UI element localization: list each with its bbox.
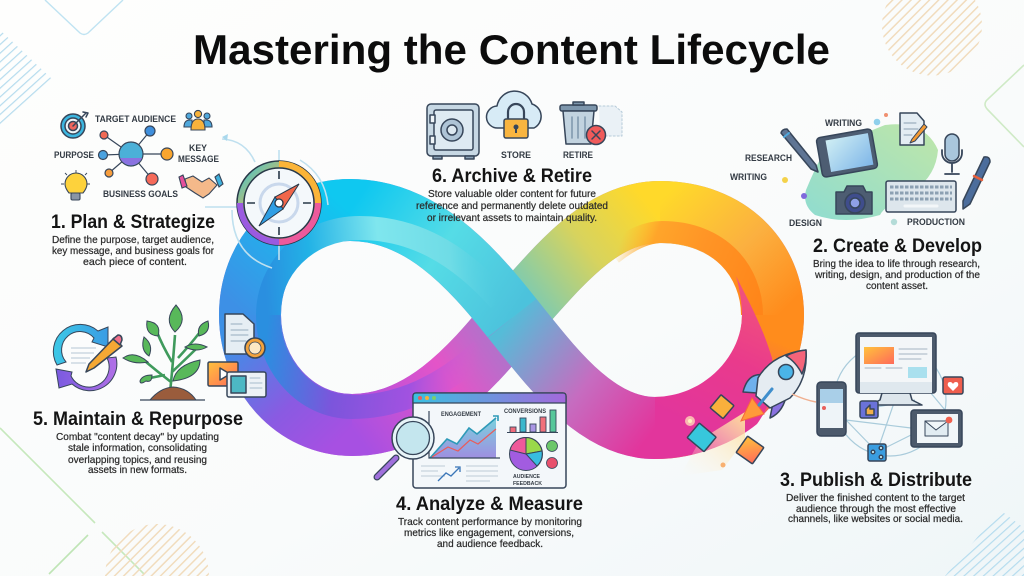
label: key message [178, 143, 219, 164]
heading 4: 4. Analyze & Measure [396, 493, 583, 515]
body 4: metrics like engagement, conversions, [404, 528, 574, 539]
icon: sync arrows [53, 324, 117, 391]
body 1: each piece of content. [83, 257, 187, 268]
icon: document [900, 113, 927, 145]
icon: audience [184, 110, 212, 130]
icon: rocket [743, 350, 806, 418]
icon: handshake [179, 174, 223, 198]
body 1: key message, and business goals for [52, 246, 215, 257]
icon: safe [427, 104, 479, 159]
heading 5: 5. Maintain & Repurpose [33, 408, 243, 430]
icon: pen right [963, 157, 990, 209]
icon: target [61, 112, 88, 138]
icon: pen left [781, 129, 818, 172]
icon: camera [836, 186, 872, 214]
body 3: Deliver the finished content to the target [786, 493, 965, 504]
icon: floating cards [687, 395, 764, 464]
label: key message: MESSAGE [178, 154, 219, 164]
label: research: RESEARCH [745, 153, 792, 163]
label: conversions: CONVERSIONS [504, 408, 546, 415]
mini report [421, 466, 498, 481]
rocket exhaust [680, 412, 745, 476]
label: engagement: ENGAGEMENT [441, 411, 481, 418]
label: audience feedback: FEEDBACK [513, 481, 543, 487]
body 5: stale information, consolidating [68, 443, 207, 454]
step 1: plan and strategize [51, 110, 223, 268]
icon: share [868, 444, 886, 461]
step 5: maintain and repurpose [33, 305, 266, 476]
label: target audience: TARGET AUDIENCE [95, 114, 176, 124]
icon: rocket flame [741, 398, 764, 421]
label: design: DESIGN [789, 218, 822, 228]
icon: compass [205, 134, 328, 268]
step 4: analyze and measure [377, 393, 583, 550]
icon: pencil [86, 335, 122, 372]
label: audience feedback [513, 474, 543, 487]
exhaust sparks [685, 416, 726, 468]
label: retire: RETIRE [563, 150, 593, 160]
icon: document lines [71, 348, 96, 363]
line chart [429, 411, 500, 458]
icon: arrow swoosh [792, 394, 816, 402]
icon: heart box [943, 377, 963, 394]
bar chart [507, 410, 558, 432]
feedback faces [546, 440, 558, 468]
heading 3: 3. Publish & Distribute [780, 469, 972, 491]
icon: document with badge [225, 314, 265, 358]
icon: light bulb [61, 170, 90, 200]
pie chart [510, 438, 542, 470]
infinity ribbon [250, 210, 774, 459]
network lines [834, 344, 946, 456]
dashboard panel [413, 393, 566, 488]
body 5: overlapping topics, and reusing [68, 455, 207, 466]
icon: email tablet [911, 410, 962, 447]
green blob [805, 124, 938, 220]
icon: phone [817, 382, 846, 436]
body 6: or irrelevant assets to maintain quality. [427, 213, 597, 224]
icon: tablet [816, 128, 878, 178]
accent dots [782, 113, 897, 225]
label: writing top: WRITING [825, 118, 862, 128]
title: Mastering the Content Lifecycle [193, 26, 830, 73]
body 2: writing, design, and production of the [814, 270, 980, 281]
label: key message: KEY [189, 143, 207, 153]
body 2 [813, 259, 980, 292]
step 3: publish and distribute [680, 333, 972, 525]
icon: video and card [208, 362, 266, 397]
body 2: Bring the idea to life through research, [813, 259, 980, 270]
icon: keyboard [886, 181, 956, 212]
body 3 [786, 493, 965, 525]
body 5: assets in new formats. [88, 465, 187, 476]
body 6: Store valuable older content for future [428, 189, 596, 200]
heading 1: 1. Plan & Strategize [51, 211, 215, 233]
body 4: and audience feedback. [437, 539, 543, 550]
icon: trash [560, 102, 622, 144]
icon: magnifier [377, 417, 434, 477]
icon: microphone [942, 134, 962, 174]
body 1 [52, 235, 215, 268]
icon: strategy network [98, 126, 173, 185]
icon: monitor [856, 333, 936, 405]
body 6 [416, 189, 608, 224]
body 1: Define the purpose, target audience, [52, 235, 214, 246]
body 5 [56, 432, 219, 476]
label: audience feedback: AUDIENCE [513, 474, 540, 480]
label: business goals: BUSINESS GOALS [103, 189, 178, 199]
heading 2: 2. Create & Develop [813, 235, 982, 257]
icon: cloud lock [486, 91, 541, 138]
body 5: Combat "content decay" by updating [56, 432, 219, 443]
label: store: STORE [501, 150, 531, 160]
label: writing: WRITING [730, 172, 767, 182]
body 3: audience through the most effective [796, 504, 956, 515]
body 3: channels, like websites or social media. [788, 514, 963, 525]
step 2: create and develop [730, 113, 990, 292]
step 6: archive and retire [416, 91, 622, 224]
label: production: PRODUCTION [907, 217, 965, 227]
body 4: Track content performance by monitoring [398, 517, 582, 528]
heading 6: 6. Archive & Retire [432, 165, 592, 187]
icon: plant [123, 305, 209, 400]
body 4 [398, 517, 582, 550]
body 2: content asset. [866, 281, 928, 292]
icon: thumbs up [860, 401, 878, 418]
label: purpose: PURPOSE [54, 150, 94, 160]
body 6: reference and permanently delete outdated [416, 201, 608, 212]
